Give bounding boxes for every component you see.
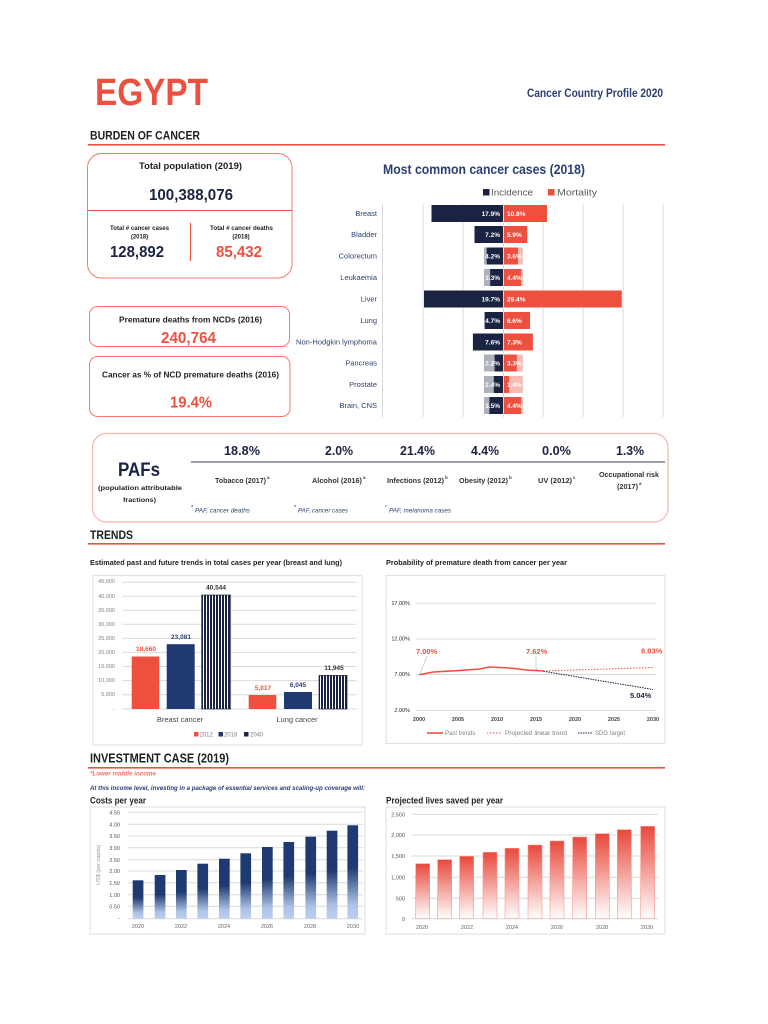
bar value labels: 7.2% [485, 232, 500, 239]
y axis labels: 2,500 [391, 812, 405, 818]
label: premature deaths: Premature deaths from NCDs (2016) [119, 314, 262, 324]
number: premature deaths: 240,764 [161, 330, 216, 347]
chart title: total cases trends: Estimated past and future trends in total cases per year (breast and lung) [90, 558, 342, 567]
bar value labels: 3.3% [507, 360, 522, 368]
PAF footnotes: b [294, 503, 297, 508]
legend: 2018 [224, 732, 238, 738]
y axis labels: 0 [402, 917, 405, 923]
PAF values [224, 444, 644, 458]
legend: Projected linear trend [505, 731, 567, 737]
line value labels: 7.00% [416, 647, 438, 656]
y axis labels: 1.00 [109, 893, 120, 899]
title: Egypt: EGYPT [95, 72, 208, 114]
y axis labels: 2.50 [109, 858, 120, 864]
x axis labels: 2024 [218, 924, 230, 930]
line: projected linear trend [543, 668, 653, 671]
legend [194, 732, 264, 738]
x axis labels: 2010 [491, 717, 503, 723]
y axis labels: 2.00 [109, 869, 120, 875]
bar value labels: 3.6% [507, 254, 522, 260]
x axis labels: 2020 [416, 925, 428, 931]
bar value labels: 5,017 [255, 685, 272, 692]
legend: 2040 [250, 732, 264, 738]
bar value labels: 6.6% [507, 318, 522, 325]
x axis labels: 2024 [506, 925, 518, 931]
leader lines [420, 656, 536, 674]
PAF risk labels: Infections (2012) [387, 478, 444, 485]
bar value labels: 3.3% [485, 275, 500, 282]
chart title: Most common cancer cases (2018) [383, 161, 585, 177]
bar value labels: 5.9% [507, 232, 522, 239]
panel: cancer as percent of NCD premature deaths [90, 356, 290, 416]
y axis labels: 17.00% [391, 601, 410, 607]
line value labels [416, 646, 663, 700]
heading: trends: TRENDS [90, 530, 133, 542]
category labels: Liver [361, 294, 377, 304]
x axis labels: 2026 [551, 925, 563, 931]
PAF values: 4.4% [471, 444, 499, 458]
chart: total cases per year [93, 576, 362, 745]
legend: SDG target [595, 731, 625, 737]
category labels: Colorectum [339, 252, 377, 260]
x axis labels: 2015 [530, 717, 542, 723]
number: cancer deaths: 85,432 [216, 244, 262, 261]
category labels: Bladder [351, 230, 377, 239]
legend: 2012 [200, 732, 214, 738]
y axis labels: 15,000 [98, 664, 115, 670]
x axis labels: 2005 [452, 717, 464, 723]
line value labels: 7.62% [526, 647, 548, 656]
number: total population: 100,388,076 [149, 187, 233, 204]
label: year cases: (2018) [131, 234, 148, 240]
y axis labels: 3.50 [109, 834, 120, 840]
PAF footnotes: a [191, 503, 194, 508]
category labels [157, 715, 318, 724]
bars: lives saved [416, 826, 655, 919]
heading: investment case: INVESTMENT CASE (2019) [90, 752, 229, 766]
PAF risk labels: Tobacco (2017) [215, 478, 266, 485]
category labels: Leukaemia [340, 273, 378, 282]
PAFs description [98, 485, 182, 504]
x axis labels: 2030 [347, 924, 359, 930]
line value labels: 8.03% [641, 646, 663, 656]
label: total cancer cases: Total # cancer cases [110, 225, 169, 232]
note: investment statement: At this income level, investing in a package of essential services and scaling-up coverage will: [89, 785, 365, 792]
y axis labels: 1.50 [109, 881, 120, 887]
y axis labels: 25,000 [98, 636, 115, 642]
label: total population: Total population (2019) [139, 161, 242, 172]
x axis labels: 2030 [641, 925, 653, 931]
PAF values: 2.0% [325, 444, 353, 458]
y axis labels: 35,000 [98, 608, 115, 614]
PAF footnotes [191, 503, 451, 514]
x axis labels: 2022 [175, 924, 187, 930]
bar value labels: 19.7% [482, 296, 500, 304]
PAF risk labels: a [363, 475, 366, 480]
label: year deaths: (2018) [232, 234, 250, 240]
x axis labels: 2020 [132, 924, 144, 930]
y axis labels: 4.50 [109, 810, 120, 816]
chart: most common cancer cases [296, 161, 663, 417]
legend [427, 731, 625, 737]
category labels: Breast [355, 209, 378, 218]
bar value labels: 10.8% [507, 211, 526, 218]
y axis labels: 45,000 [98, 579, 115, 585]
bar value labels: 7.6% [485, 340, 500, 346]
x axis labels: 2022 [461, 925, 473, 931]
y axis labels: 30,000 [98, 622, 115, 628]
chart title: projected lives saved: Projected lives saved per year [386, 796, 503, 806]
PAF values: 1.3% [616, 444, 644, 458]
bars: 2012 [132, 656, 276, 709]
bar value labels: 23,081 [171, 634, 191, 641]
line value labels: 5.04% [630, 691, 652, 700]
y axis labels: - [118, 916, 120, 922]
y axis labels: 5,000 [101, 692, 115, 698]
PAF risk labels [215, 472, 659, 491]
y axis labels: 0.50 [109, 904, 120, 910]
y axis labels: 1,000 [391, 876, 405, 882]
y axis labels: 12.00% [391, 636, 410, 642]
bar value labels: 7.3% [507, 340, 522, 346]
PAF risk labels: (2017) [617, 484, 638, 491]
bar value labels: 3.5% [485, 403, 500, 410]
x axis labels: 2020 [569, 717, 581, 723]
bar value labels: 4.4% [507, 403, 522, 410]
number: cancer cases: 128,892 [110, 244, 164, 261]
category labels: Non-Hodgkin lymphoma [296, 338, 378, 346]
number: cancer percent: 19.4% [170, 394, 212, 412]
bar value labels: 29.4% [507, 296, 526, 304]
bar value labels: 2.2% [485, 360, 500, 368]
bar value labels [136, 584, 344, 692]
heading: burden of cancer: BURDEN OF CANCER [90, 130, 201, 142]
x axis labels [416, 925, 653, 931]
note: lower middle income: *Lower middle income [90, 772, 157, 778]
chart title: probability of premature death: Probability of premature death from cancer per year [386, 558, 567, 567]
chart title: costs per year: Costs per year [90, 796, 146, 806]
PAF risk labels: Occupational risk [599, 472, 659, 479]
PAF risk labels: UV (2012) [538, 478, 572, 485]
chart: projected lives saved per year [386, 807, 665, 934]
bar value labels: 2.4% [485, 382, 500, 389]
y axis labels: 4.00 [109, 822, 120, 828]
bar value labels: 4.2% [485, 254, 500, 260]
x axis labels: 2000 [413, 717, 425, 723]
bar value labels: 4.7% [485, 318, 500, 325]
y axis labels [391, 601, 410, 714]
legend: Incidence [491, 188, 533, 198]
y axis title: US$ (per capita) [96, 845, 102, 885]
PAF footnotes: c [385, 503, 387, 508]
bars: costs [133, 825, 358, 919]
panel: premature deaths from NCDs [90, 306, 290, 347]
x axis labels: 2028 [304, 924, 316, 930]
bar value labels: 11,945 [324, 665, 344, 672]
PAF values: 18.8% [224, 444, 260, 458]
y axis labels: 500 [396, 896, 405, 902]
bar value labels: 18,660 [136, 646, 156, 653]
line: SDG target [536, 670, 653, 690]
category labels: Breast cancer [157, 715, 204, 724]
x axis labels [132, 924, 359, 930]
PAF values: 21.4% [400, 444, 435, 458]
y axis labels: - [113, 707, 115, 713]
bar value labels [482, 211, 526, 410]
PAF values: 0.0% [542, 444, 571, 458]
category labels: Brain, CNS [339, 401, 377, 410]
panel: population and totals [88, 154, 292, 278]
line: past trends [419, 667, 543, 675]
x axis labels: 2025 [608, 717, 620, 723]
bar value labels: 17.9% [482, 211, 500, 218]
incidence bars [424, 205, 504, 414]
PAFs description: fractions) [123, 497, 156, 504]
label: total cancer deaths: Total # cancer deaths [210, 225, 273, 232]
PAF risk labels: Alcohol (2016) [312, 478, 362, 485]
category labels [296, 209, 378, 410]
x axis labels: 2030 [647, 717, 659, 723]
x axis labels [413, 717, 659, 723]
y axis labels: 20,000 [98, 650, 115, 656]
PAF footnotes: PAF, melanoma cases [389, 508, 451, 514]
legend: Mortality [557, 188, 598, 198]
PAF risk labels: a [267, 475, 270, 480]
y axis labels: 3.00 [109, 846, 120, 852]
bar value labels: 40,544 [206, 584, 226, 592]
bars: 2040 [202, 595, 347, 709]
bar value labels: 4.4% [507, 275, 522, 282]
y axis labels [109, 810, 120, 922]
bars: 2018 [167, 644, 312, 709]
y axis labels: 40,000 [98, 594, 115, 600]
bar value labels: 6,045 [290, 682, 307, 689]
PAF footnotes: PAF, cancer cases [298, 508, 348, 514]
y axis labels: 1,500 [391, 854, 405, 860]
label: cancer percent: Cancer as % of NCD premature deaths (2016) [102, 370, 279, 380]
category labels: Prostate [349, 380, 377, 389]
chart: costs per year [90, 807, 365, 934]
PAF risk labels: Obesity (2012) [459, 478, 508, 485]
x axis labels: 2028 [596, 925, 608, 931]
PAFs description: (population attributable [98, 485, 182, 492]
bar value labels: 1.4% [507, 382, 522, 389]
category labels: Pancreas [345, 358, 377, 368]
PAF risk labels: a [639, 481, 642, 486]
category labels: Lung cancer [276, 715, 318, 724]
y axis labels [98, 579, 115, 713]
legend: Past trends [445, 731, 475, 737]
subtitle: Cancer Country Profile 2020: Cancer Country Profile 2020 [527, 88, 663, 100]
PAF risk labels: b [509, 475, 512, 480]
label backing bars [484, 248, 523, 414]
PAF risk labels: b [445, 475, 448, 480]
y axis labels: 2.00% [394, 708, 410, 714]
y axis labels: 10,000 [98, 678, 115, 684]
x axis labels: 2026 [261, 924, 273, 930]
chart: probability of premature death [386, 576, 665, 744]
category labels: Lung [360, 316, 377, 325]
PAFs heading: PAFs [118, 460, 160, 481]
PAF risk labels: c [573, 475, 576, 480]
y axis labels [391, 812, 405, 923]
y axis labels: 7.00% [394, 672, 410, 678]
mortality bars [504, 205, 622, 414]
legend [483, 188, 598, 198]
panel: PAFs [92, 434, 668, 522]
y axis labels: 2,000 [391, 833, 405, 839]
PAF footnotes: PAF, cancer deaths [195, 508, 250, 514]
